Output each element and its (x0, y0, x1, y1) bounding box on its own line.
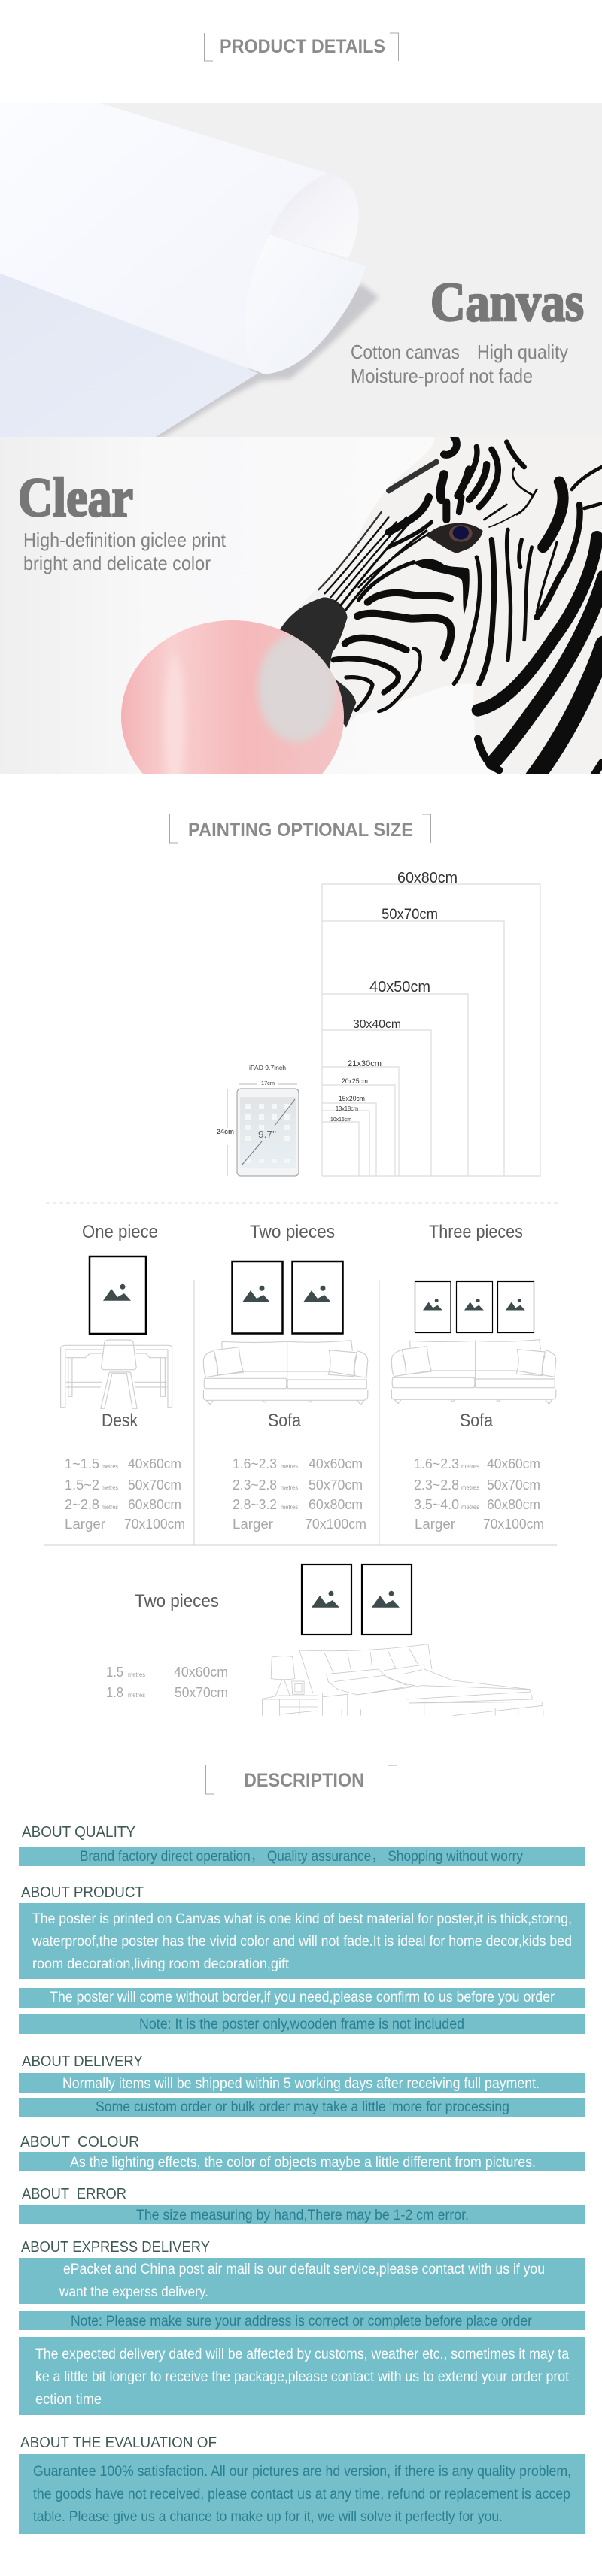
bar: delivery date: ection time (35, 2392, 102, 2408)
illustration: sofa (391, 1340, 556, 1404)
table: three-piece sizes: metres (461, 1463, 479, 1470)
table: three-piece sizes: 70x100cm (483, 1517, 544, 1532)
text: clear features: bright and delicate color (23, 552, 211, 574)
bar: delivery date: ke a little bit longer to receive the package,please contact with us to extend your order prot (35, 2369, 570, 2385)
table: three-piece sizes: metres (461, 1504, 479, 1511)
heading: two pieces: Two pieces (135, 1591, 219, 1611)
table: three-piece sizes: 50x70cm (487, 1477, 540, 1493)
label: desk: Desk (102, 1411, 138, 1431)
frame: single poster (90, 1256, 146, 1334)
table: desk sizes: metres (102, 1463, 118, 1470)
section: about colour (19, 2134, 585, 2171)
table: three-piece sizes: metres (461, 1484, 479, 1491)
bar: product description: The poster is printed on Canvas what is one kind of best material for poster,it is thick,storng, (32, 1911, 572, 1927)
table: two-piece sizes: 2.3~2.8 (233, 1477, 277, 1493)
bar: quality (19, 1847, 585, 1866)
table: two-piece sizes: metres (281, 1463, 298, 1470)
bar: guarantee: the goods have not received, please contact us at any time, refund or replacement is accep (33, 2487, 570, 2502)
size 20x25cm (322, 1077, 395, 1176)
bar: guarantee: table. Please give us a chance to make up for it, we will solve it perfectly for you. (33, 2509, 503, 2525)
table: bed sizes: 50x70cm (175, 1685, 228, 1700)
text: clear features: High-definition giclee print (23, 529, 227, 551)
illustration: iPad scale reference: 24cm (217, 1128, 234, 1135)
bar: frame note: Note: It is the poster only,wooden frame is not included (139, 2017, 464, 2032)
chart: size comparison (322, 870, 540, 1176)
size 30x40cm (322, 1018, 431, 1176)
section: about error (19, 2186, 585, 2224)
panel: canvas (0, 103, 602, 439)
icon: zebra eye (427, 523, 483, 553)
table: desk sizes: 2~2.8 (65, 1497, 99, 1512)
size 20x25cm: 20x25cm (342, 1077, 368, 1085)
table: desk sizes: 60x80cm (128, 1497, 181, 1512)
table: desk sizes: 1~1.5 (65, 1456, 99, 1471)
table: two-piece sizes: 50x70cm (309, 1477, 363, 1493)
table: two-piece sizes: metres (281, 1484, 298, 1491)
illustration: iPad scale reference: 17cm (261, 1081, 275, 1086)
table: desk sizes: 40x60cm (128, 1456, 181, 1471)
table: bed sizes: 1.8 (106, 1685, 123, 1700)
table: three-piece sizes: 3.5~4.0 (414, 1497, 459, 1512)
bar: product description: waterproof,the poster has the vivid color and will not fade.It is ideal for home decor,kids bed (32, 1934, 572, 1950)
bar: size error: The size measuring by hand,There may be 1-2 cm error. (136, 2208, 469, 2223)
heading: painting optional size: PAINTING OPTIONAL SIZE (188, 820, 413, 841)
table: bed sizes: metres (128, 1692, 145, 1699)
table: two-piece sizes: Larger (233, 1517, 273, 1532)
size 15x20cm (322, 1095, 376, 1176)
heading: one piece: One piece (82, 1222, 158, 1242)
size 10x15cm (322, 1117, 359, 1176)
heading: about product: ABOUT PRODUCT (21, 1884, 144, 1901)
panel: two pieces bed (106, 1565, 543, 1716)
table: desk sizes (65, 1456, 185, 1532)
illustration: bed and nightstand (262, 1644, 543, 1716)
section: about express delivery (19, 2239, 585, 2415)
panel: three pieces sofa (391, 1222, 556, 1532)
table: desk sizes: Larger (65, 1517, 105, 1532)
table: desk sizes: 1.5~2 (65, 1477, 99, 1493)
label: sofa: Sofa (460, 1411, 494, 1431)
size 60x80cm (322, 870, 540, 1176)
divider: dashed line (46, 1202, 559, 1204)
table: bed sizes: metres (128, 1671, 145, 1678)
table: two-piece sizes: 60x80cm (309, 1497, 363, 1512)
text: canvas features: Cotton canvas (351, 341, 460, 363)
table: three-piece sizes (414, 1456, 544, 1532)
heading: description (206, 1765, 397, 1794)
size 30x40cm: 30x40cm (353, 1018, 401, 1031)
size 60x80cm: 60x80cm (397, 870, 458, 886)
table: two-piece sizes: 70x100cm (305, 1517, 366, 1532)
section: about quality (19, 1824, 585, 1866)
table: two-piece sizes (233, 1456, 366, 1532)
size 50x70cm: 50x70cm (382, 907, 438, 923)
bar: default service: want the experss delivery. (59, 2284, 208, 2300)
panel: one piece desk (61, 1222, 185, 1532)
table: two-piece sizes: 1.6~2.3 (233, 1456, 277, 1471)
heading: about the evaluation of: ABOUT THE EVALUATION OF (20, 2435, 217, 2451)
table: two-piece sizes: 2.8~3.2 (233, 1497, 277, 1512)
text: canvas features (351, 341, 568, 387)
illustration: iPad scale reference: 9.7" (258, 1129, 276, 1140)
bar: size error (19, 2205, 585, 2224)
table: bed sizes (106, 1665, 228, 1700)
illustration: pink bubble (121, 620, 344, 774)
bar: shipping time: Normally items will be shipped within 5 working days after receiving full payment. (62, 2076, 540, 2092)
bar: product description (19, 1903, 585, 1979)
heading: about express delivery: ABOUT EXPRESS DELIVERY (21, 2239, 210, 2256)
bar: custom orders (19, 2098, 585, 2117)
bar: delivery date: The expected delivery dated will be affected by customs, weather etc., sometimes it may ta (35, 2347, 569, 2362)
label: sofa: Sofa (268, 1411, 302, 1431)
heading: product details: PRODUCT DETAILS (220, 36, 385, 57)
bar: quality: Brand factory direct operation， Quality assurance， Shopping without worry (80, 1849, 523, 1865)
heading: painting optional size (170, 814, 430, 843)
table: three-piece sizes: 1.6~2.3 (414, 1456, 459, 1471)
illustration: zebra (280, 437, 602, 777)
table: bed sizes: 40x60cm (174, 1665, 228, 1680)
heading: about delivery: ABOUT DELIVERY (22, 2053, 143, 2070)
text: clear features (23, 529, 227, 574)
section: about the evaluation (19, 2435, 585, 2534)
bar: address note: Note: Please make sure your address is correct or complete before place order (71, 2314, 533, 2329)
frames: two posters (302, 1565, 412, 1635)
size 21x30cm: 21x30cm (348, 1059, 382, 1068)
size 50x70cm (322, 907, 504, 1176)
illustration: iPad scale reference (217, 1065, 299, 1176)
bar: colour note: As the lighting effects, the color of objects maybe a little different from pictures. (70, 2155, 536, 2171)
table: three-piece sizes: 2.3~2.8 (414, 1477, 459, 1493)
size 21x30cm (322, 1059, 399, 1176)
heading: about quality: ABOUT QUALITY (22, 1824, 135, 1841)
table: two-piece sizes: metres (281, 1504, 298, 1511)
bar: border note: The poster will come without border,if you need,please confirm to us before you order (50, 1990, 555, 2005)
size 10x15cm: 10x15cm (330, 1117, 351, 1123)
table: three-piece sizes: 60x80cm (487, 1497, 540, 1512)
bar: delivery date (19, 2337, 585, 2415)
size 13x18cm (322, 1105, 369, 1176)
panel: two pieces sofa (203, 1222, 368, 1532)
heading: about colour: ABOUT COLOUR (20, 2134, 139, 2150)
section: about product (19, 1884, 585, 2034)
bar: product description: room decoration,living room decoration,gift (32, 1956, 290, 1972)
panel: clear (0, 437, 602, 774)
text: canvas features: High quality (477, 341, 568, 363)
title: Canvas: Canvas (430, 271, 584, 332)
bar: guarantee (19, 2454, 585, 2534)
bar: custom orders: Some custom order or bulk order may take a little 'more for processing (96, 2099, 509, 2115)
size 15x20cm: 15x20cm (339, 1095, 365, 1102)
bar: default service: ePacket and China post air mail is our default service,please contact with us if you (63, 2262, 545, 2277)
heading: description: DESCRIPTION (244, 1770, 364, 1791)
table: desk sizes: 70x100cm (124, 1517, 185, 1532)
table: three-piece sizes: Larger (415, 1517, 455, 1532)
table: three-piece sizes: 40x60cm (487, 1456, 540, 1471)
illustration: iPad scale reference: iPAD 9.7inch (249, 1065, 286, 1071)
text: canvas features: Moisture-proof not fade (351, 365, 533, 387)
frames: two posters (232, 1262, 343, 1334)
table: two-piece sizes: 40x60cm (309, 1456, 363, 1471)
bar: guarantee: Guarantee 100% satisfaction. All our pictures are hd version, if there is any quality problem, (33, 2464, 571, 2480)
title: Clear: Clear (18, 467, 133, 528)
heading: product details (205, 33, 399, 61)
illustration: desk and chair (61, 1340, 172, 1408)
table: desk sizes: metres (102, 1484, 118, 1491)
table: desk sizes: 50x70cm (128, 1477, 181, 1493)
frames: three posters (415, 1281, 534, 1332)
section: about delivery (19, 2053, 585, 2117)
heading: about error: ABOUT ERROR (22, 2186, 126, 2202)
size 40x50cm: 40x50cm (369, 979, 430, 996)
heading: three pieces: Three pieces (429, 1222, 523, 1242)
table: desk sizes: metres (102, 1504, 118, 1511)
bar: default service (19, 2258, 585, 2304)
size 40x50cm (322, 979, 468, 1176)
illustration: rolled canvas sheet (0, 103, 379, 439)
size 13x18cm: 13x18cm (336, 1105, 358, 1112)
bar: frame note (19, 2014, 585, 2034)
table: bed sizes: 1.5 (106, 1665, 123, 1680)
illustration: sofa (203, 1341, 368, 1405)
heading: two pieces: Two pieces (250, 1222, 335, 1242)
